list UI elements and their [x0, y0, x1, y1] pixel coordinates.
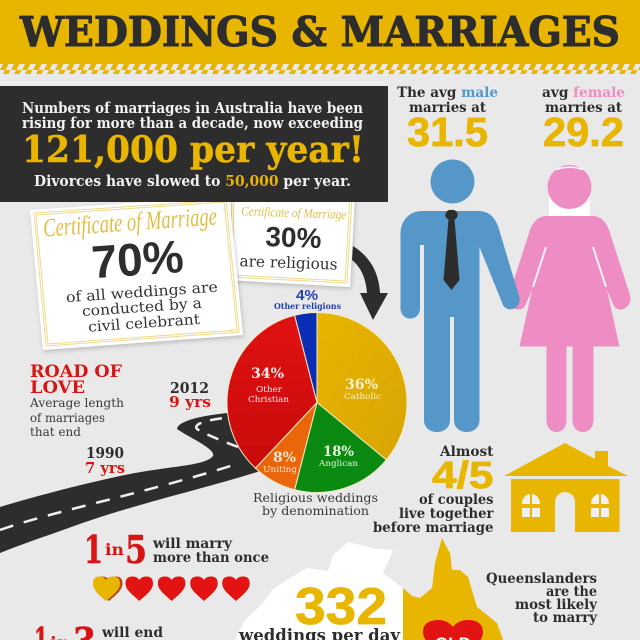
Queenslanders text: to marry — [533, 610, 598, 626]
cohabitation stat: live together — [399, 506, 494, 522]
1 in 5 stat — [84, 527, 269, 572]
2012 label: 9 yrs — [169, 393, 211, 411]
title: WEDDINGS & MARRIAGES — [19, 8, 620, 56]
pie label: uniting — [263, 450, 297, 474]
pie chart caption: by denomination — [262, 503, 369, 518]
pie chart caption: Religious weddings — [253, 490, 378, 505]
332 weddings per day — [238, 578, 401, 640]
intro text: rising for more than a decade, now exceeding — [22, 114, 363, 132]
female age: marries at — [545, 100, 623, 116]
2012 label: 2012 — [170, 379, 209, 397]
certificate script heading small: Certificate of Marriage — [241, 203, 347, 222]
pie label: catholic: 36% — [345, 377, 378, 393]
121,000 per year: 121,000 per year! — [22, 129, 364, 171]
civil celebrant text: of all weddings are — [66, 280, 218, 306]
arrow to pie chart — [352, 246, 388, 320]
male age — [397, 85, 498, 155]
civil celebrant text: conducted by a — [82, 296, 203, 320]
road of love description: that end — [30, 424, 81, 439]
pie label: anglican: 18% — [323, 444, 354, 460]
pie label: uniting: Uniting — [263, 465, 297, 474]
pie label: anglican: Anglican — [318, 459, 359, 469]
pie label: other religions — [274, 287, 341, 312]
certificate: 70% civil celebrant — [30, 196, 243, 350]
road of love heading — [30, 362, 122, 398]
road of love heading: ROAD OF — [30, 362, 122, 382]
female age — [542, 85, 625, 155]
1 in 5 stat: 5 — [125, 527, 147, 572]
icon: groom — [400, 160, 520, 432]
map of Australia — [235, 538, 503, 640]
pie label: anglican — [318, 444, 359, 469]
divorces text: Divorces have slowed to 50,000 per year. — [34, 173, 351, 190]
road of love graphic — [0, 410, 262, 553]
certificate: 30% are religious — [227, 195, 355, 287]
cohabitation stat: Almost — [439, 444, 494, 460]
pie label: other religions: 4% — [296, 287, 318, 304]
1 in 5 stat: will marry — [152, 536, 233, 552]
certificate script heading large: Certificate of Marriage — [42, 202, 218, 243]
332 weddings per day: 332 — [295, 578, 387, 636]
icon: house — [504, 443, 628, 532]
icon: QLD heart — [423, 620, 483, 640]
pie label: other christian: 34% — [251, 366, 284, 382]
2012 label — [169, 379, 211, 411]
pie chart: religious denominations — [227, 312, 407, 493]
1 in 3 stat — [34, 619, 163, 640]
Queenslanders text: are the — [546, 584, 597, 600]
are religious text: are religious — [239, 252, 338, 274]
male age: 31.5 — [407, 109, 488, 155]
30% figure: 30% — [265, 221, 322, 254]
cohabitation stat: of couples — [419, 492, 494, 508]
hearts row — [93, 576, 250, 601]
1 in 5 stat: in — [105, 540, 124, 559]
road of love heading: LOVE — [30, 378, 85, 398]
civil celebrant text: civil celebrant — [88, 312, 201, 336]
road of love description: Average length — [29, 395, 124, 410]
female age: 29.2 — [543, 109, 624, 155]
pie label: other religions: Other religions — [274, 302, 341, 312]
cohabitation stat — [373, 444, 494, 536]
1990 label: 7 yrs — [85, 459, 125, 477]
intro panel — [0, 86, 388, 202]
1990 label — [85, 444, 125, 477]
female age: avg female — [542, 85, 625, 101]
intro text: Numbers of marriages in Australia have been — [22, 99, 363, 117]
pie label: other christian — [248, 366, 289, 404]
cohabitation stat: 4/5 — [432, 455, 494, 497]
Queenslanders text: most likely — [515, 597, 598, 613]
road of love description: of marriages — [30, 410, 105, 425]
header banner — [0, 0, 640, 74]
icon: bride — [509, 165, 630, 432]
1 in 5 stat: more than once — [153, 550, 269, 566]
Queenslanders text: Queenslanders — [486, 571, 597, 587]
pie label: catholic: Catholic — [344, 392, 382, 401]
70% figure: 70% — [90, 230, 185, 288]
pie label: other christian: Christian — [248, 395, 289, 404]
map: Queensland — [403, 538, 503, 640]
cohabitation stat: before marriage — [373, 520, 494, 536]
icon: tie — [444, 210, 460, 290]
pie label: catholic — [344, 377, 382, 401]
pie label: other christian: Other — [256, 385, 282, 394]
male age: marries at — [409, 100, 487, 116]
1990 label: 1990 — [86, 444, 124, 462]
male age: The avg male — [397, 85, 498, 101]
1 in 5 stat: 1 — [84, 527, 103, 572]
pie label: uniting: 8% — [273, 450, 296, 466]
